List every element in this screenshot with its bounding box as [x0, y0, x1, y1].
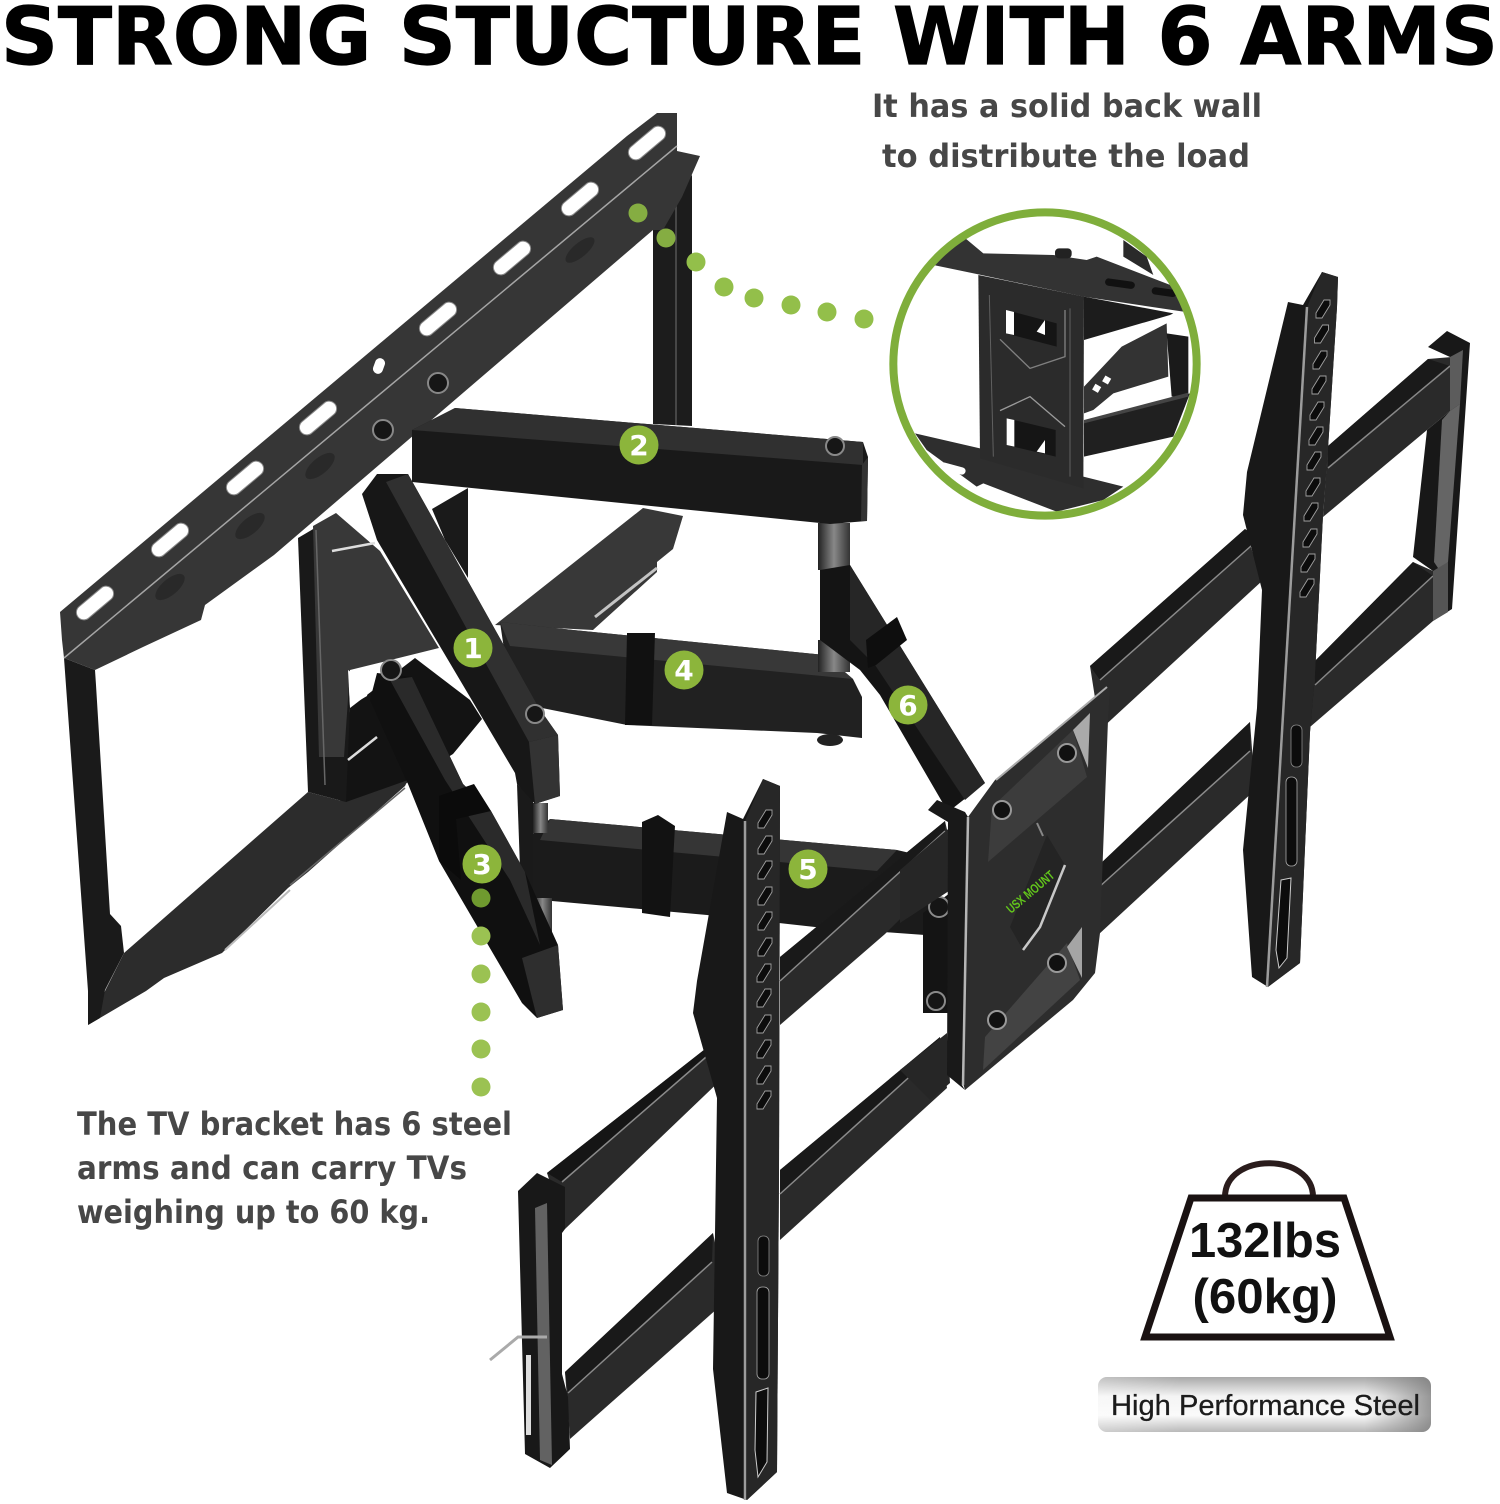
strap on arm 6	[866, 617, 907, 668]
center vertical plate	[978, 275, 1084, 488]
upper rail center right	[1090, 529, 1262, 730]
arm 2	[412, 408, 868, 524]
strap on arm 5	[642, 815, 675, 917]
badge: high performance steel	[1098, 1377, 1431, 1432]
text block: steel arms: arms and can carry TVs	[77, 1149, 467, 1187]
number badges	[454, 426, 928, 888]
left column	[298, 525, 350, 802]
arm 3	[370, 673, 563, 1018]
inner vertical post	[653, 175, 692, 426]
rear mass behind center plate	[340, 658, 482, 805]
upper right column	[432, 488, 468, 578]
badge 6: 6	[898, 689, 918, 722]
badge 2	[620, 426, 658, 464]
band fold lines	[64, 146, 677, 658]
lower rail center left	[780, 1037, 947, 1240]
badge 2: 2	[629, 429, 649, 462]
badge 1	[454, 628, 492, 668]
callout: solid back wall	[872, 87, 1262, 175]
front plate	[962, 687, 1110, 1090]
dotted leader: arms	[472, 888, 490, 1096]
slots on left bracket	[755, 810, 772, 1477]
arm 5	[517, 784, 940, 940]
arm 1	[362, 474, 560, 804]
wall plate assembly	[60, 113, 700, 1025]
badge 4: 4	[674, 654, 694, 687]
text block: steel arms: The TV bracket has 6 steel	[77, 1105, 512, 1143]
plate highlights	[332, 543, 377, 760]
side bracket	[928, 800, 968, 1090]
upper window hood	[1000, 310, 1065, 368]
back beams	[1084, 297, 1173, 340]
text block: steel arms	[77, 1105, 512, 1231]
TV rails	[490, 331, 1470, 1468]
lower rail center right	[1098, 722, 1255, 935]
bottom band	[915, 433, 1123, 512]
strap on arm 4	[625, 633, 655, 725]
badge 3: 3	[472, 848, 492, 881]
badge: high performance steel: High Performance Steel	[1111, 1390, 1420, 1422]
badge 6	[888, 686, 928, 724]
badge 3	[462, 844, 502, 884]
callout: solid back wall: to distribute the load	[882, 137, 1250, 175]
column edge highlight	[316, 530, 325, 785]
right vertical TV bracket	[1243, 272, 1338, 987]
dotted leader: wall	[628, 204, 874, 328]
icon: weight 132lbs: 132lbs	[1189, 1214, 1341, 1268]
white gap in center plate	[348, 670, 369, 706]
lower rail far left	[565, 1233, 727, 1439]
rail stubs and bolt column	[923, 893, 957, 1013]
inset detail circle	[893, 212, 1197, 516]
strap on arm 3	[439, 784, 491, 880]
left frame end	[518, 1173, 570, 1468]
center mounting plate	[900, 687, 1110, 1100]
lower recess	[983, 943, 1080, 1070]
badge 4	[664, 650, 704, 690]
top diagonal wall band	[60, 113, 700, 670]
bolts	[373, 373, 844, 723]
upper window	[1006, 310, 1057, 347]
plate bolts	[988, 744, 1076, 1029]
lower right band of wall frame	[495, 508, 683, 630]
lower window hood	[1000, 397, 1065, 427]
icon: weight 132lbs	[1145, 1163, 1390, 1337]
plate grooves	[989, 295, 1070, 477]
logo: USX MOUNT	[1003, 867, 1057, 916]
arm 6	[818, 523, 985, 812]
pivot cylinders	[533, 803, 552, 940]
band smudges	[151, 233, 598, 605]
badge 5	[788, 850, 828, 888]
lower band of wall frame	[88, 780, 408, 1025]
rail pins	[722, 793, 1266, 1315]
badge 1: 1	[463, 632, 483, 665]
left vertical of wall frame	[64, 658, 124, 1025]
center logo plate	[1010, 823, 1065, 950]
wall band slots	[73, 123, 669, 623]
left vertical TV bracket	[693, 779, 780, 1500]
upper rail far left	[547, 1035, 727, 1229]
callout: solid back wall: It has a solid back wall	[872, 87, 1262, 125]
right frame end	[1413, 331, 1470, 621]
latch pin	[490, 1337, 547, 1360]
slots on right bracket	[1276, 300, 1330, 968]
text block: steel arms: weighing up to 60 kg.	[77, 1193, 430, 1231]
left column of arm 5	[517, 784, 533, 925]
center wall plate	[313, 513, 439, 757]
lower window	[1012, 420, 1056, 456]
top band	[933, 237, 1183, 312]
upper rail center left	[780, 821, 955, 1025]
badge 5: 5	[798, 853, 818, 886]
arm 4	[500, 622, 862, 746]
lower rail far right	[1310, 562, 1433, 727]
upper rail far right	[1323, 357, 1452, 517]
upper recess	[988, 730, 1087, 862]
icon: weight 132lbs: (60kg)	[1192, 1270, 1338, 1324]
